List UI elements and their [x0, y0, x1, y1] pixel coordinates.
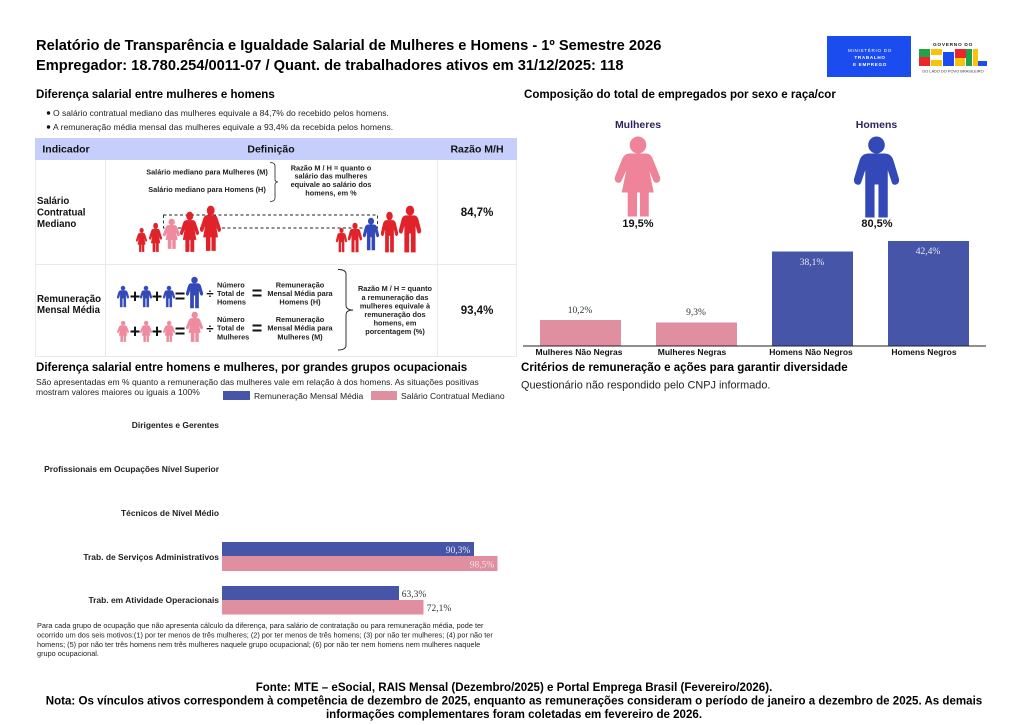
equation: women: +	[130, 322, 140, 342]
bar chart: occupational groups	[44, 420, 498, 614]
equation: women: Mensal Média para	[267, 324, 334, 332]
footer note: Fonte: MTE – eSocial, RAIS Mensal (Dezembro/2025) e Portal Emprega Brasil (Fevereiro/2026).	[256, 682, 772, 694]
text block: footnote: ocorrido um dos seis motivos:(1) por ter menos de três mulheres; (2) por ter menos de três homens; (3) por não ter mulheres; (4) por não ter	[37, 630, 493, 640]
bar chart: race and sex composition: 10,2%	[568, 306, 592, 316]
row: serviços administrativos: 90,3%	[446, 546, 470, 556]
row label: salário contratual mediano	[37, 196, 85, 230]
row 1 ratio explanation	[291, 164, 372, 198]
value: 84,7%: 84,7%	[461, 207, 493, 219]
row label: salário contratual mediano: Mediano	[37, 219, 76, 230]
equation: women	[117, 312, 334, 342]
row 2 ratio explanation: Razão M / H = quanto	[358, 284, 433, 293]
panel: men share: 80,5%	[861, 218, 893, 230]
equation: men: =	[175, 286, 185, 306]
equation: men: ÷	[206, 286, 214, 301]
row 1 ratio explanation: salário das mulheres	[294, 172, 368, 180]
title	[36, 38, 661, 74]
bar chart: race and sex composition: Homens Não Negros	[769, 347, 853, 357]
panel: women share	[615, 119, 661, 230]
equation: women: Mulheres	[217, 332, 249, 342]
icons: men ordered by salary	[336, 206, 421, 252]
median dashed box	[164, 215, 378, 228]
row 2 ratio explanation: homens, em	[374, 318, 417, 328]
equation: men: Mensal Média para	[267, 289, 334, 298]
bar chart: race and sex composition: Mulheres Não Negras	[536, 347, 623, 357]
row: atividade operacional: Trab. em Atividade Operacionais	[88, 595, 219, 605]
row 1 ratio explanation: equivale ao salário dos	[291, 180, 371, 189]
text block: footnote: grupo ocupacional.	[37, 649, 99, 658]
equation: women: ÷	[206, 321, 214, 336]
icon: man	[854, 137, 899, 217]
equation: women: +	[152, 322, 162, 342]
text block: key findings: O salário contratual mediano das mulheres equivale a 84,7% do recebido pelos homens.	[53, 108, 389, 118]
equation: men: Total de	[217, 289, 245, 298]
panel: women share: 19,5%	[622, 218, 654, 230]
equation: women: Total de	[217, 324, 245, 332]
row: atividade operacional	[88, 586, 451, 614]
bar chart: occupational groups: Profissionais em Ocupações Nível Superior	[44, 464, 220, 474]
text block: questionnaire status: Questionário não respondido pelo CNPJ informado.	[521, 380, 770, 392]
logo: Ministério do Trabalho e Emprego: TRABALHO	[854, 55, 886, 60]
row 1 ratio explanation: Razão M / H = quanto o	[291, 164, 372, 172]
row: atividade operacional: 63,3%	[402, 590, 426, 600]
row label: salário contratual mediano: Contratual	[37, 208, 85, 218]
legend	[223, 391, 505, 401]
text block: footnote	[37, 621, 493, 658]
text block: footnote: homens; (5) por não ter três homens nem três mulheres naquele grupo ocupacional; (6) por não ter nem homens nem mulheres naquele	[37, 640, 480, 649]
text block: key findings	[47, 108, 393, 132]
heading: critérios: Critérios de remuneração e ações para garantir diversidade	[521, 362, 848, 374]
bar chart: race and sex composition	[523, 241, 986, 357]
row 1 labels	[146, 168, 268, 194]
panel: men share	[854, 119, 899, 230]
text block: chart description: mostram valores maiores ou iguais a 100%	[36, 387, 200, 397]
heading: grupos ocupacionais: Diferença salarial entre homens e mulheres, por grandes grupos ocupacionais	[36, 362, 467, 374]
table header: Definição	[247, 144, 295, 156]
legend: Salário Contratual Mediano	[401, 391, 505, 401]
text block: chart description: São apresentadas em % quanto a remuneração das mulheres vale em relação à dos homens. As situações positivas	[36, 377, 479, 387]
row label: remuneração mensal média: Remuneração	[37, 294, 101, 305]
icon: woman	[615, 137, 660, 216]
bar chart: occupational groups: Técnicos de Nível Médio	[121, 508, 219, 518]
bar chart: race and sex composition: 42,4%	[916, 247, 940, 257]
row label: remuneração mensal média	[37, 294, 101, 316]
footer note: Nota: Os vínculos ativos correspondem à competência de dezembro de 2025, enquanto as remunerações consideram o período de janeiro a dezembro de 2025. As demais	[46, 696, 982, 708]
equation: men: Homens (H)	[279, 298, 321, 306]
equation: men: +	[152, 286, 162, 306]
value: 93,4%: 93,4%	[461, 305, 493, 317]
bar chart: race and sex composition: Mulheres Negras	[658, 347, 727, 357]
legend: Remuneração Mensal Média	[254, 391, 364, 401]
footer note	[46, 682, 982, 721]
row 1 ratio explanation: homens, em %	[305, 188, 357, 198]
row: serviços administrativos: Trab. de Serviços Administrativos	[83, 552, 219, 562]
logo: Ministério do Trabalho e Emprego: E EMPREGO	[853, 62, 887, 67]
title: Empregador: 18.780.254/0011-07 / Quant. de trabalhadores ativos em 31/12/2025: 118	[36, 58, 624, 74]
logo: Ministério do Trabalho e Emprego: MINISTÉRIO DO	[848, 47, 892, 53]
equation: women: =	[175, 322, 185, 342]
footer note: informações complementares foram coletadas em fevereiro de 2026.	[326, 709, 702, 721]
text block: chart description	[36, 377, 479, 397]
row 2 ratio explanation	[358, 284, 433, 336]
equation: women: Remuneração	[276, 315, 325, 324]
row: serviços administrativos: 98,5%	[470, 560, 494, 570]
equation: men	[117, 277, 334, 308]
logo: Ministério do Trabalho e Emprego	[827, 36, 911, 77]
equation: women: Mulheres (M)	[277, 332, 323, 342]
heading: diferença salarial: Diferença salarial entre mulheres e homens	[36, 89, 275, 101]
icons: women ordered by salary	[136, 206, 221, 252]
row: serviços administrativos	[83, 542, 498, 571]
row 2 brace	[338, 270, 353, 350]
equation: men: Homens	[217, 298, 246, 306]
row 1 labels: Salário mediano para Mulheres (M)	[146, 168, 268, 176]
panel: men share: Homens	[856, 119, 897, 131]
equation: men: Número	[217, 280, 245, 290]
row 1 labels: Salário mediano para Homens (H)	[148, 185, 266, 194]
equation: women: =	[252, 318, 262, 338]
equation: women: Número	[217, 315, 245, 324]
table header: Indicador	[42, 144, 90, 156]
bar chart: occupational groups: Dirigentes e Gerentes	[132, 420, 219, 430]
text block: footnote: Para cada grupo de ocupação que não apresenta cálculo da diferença, para salário de contratação ou para remuneração média, pode ter	[37, 621, 484, 630]
table header	[35, 138, 517, 160]
heading: composição: Composição do total de empregados por sexo e raça/cor	[524, 89, 836, 101]
logo: Governo do Brasil	[919, 42, 987, 74]
table header: Razão M/H	[450, 144, 504, 156]
row 2 ratio explanation: mulheres equivale à	[360, 302, 431, 310]
equation: men: +	[130, 286, 140, 306]
panel: indicator table	[35, 138, 517, 356]
bar chart: race and sex composition: 9,3%	[686, 308, 706, 318]
row: atividade operacional: 72,1%	[427, 604, 451, 614]
row 2 ratio explanation: a remuneração das	[362, 293, 428, 302]
bar chart: race and sex composition: 38,1%	[800, 258, 824, 268]
panel: women share: Mulheres	[615, 119, 661, 131]
bar chart: race and sex composition: Homens Negros	[891, 347, 957, 357]
row label: salário contratual mediano: Salário	[37, 196, 69, 207]
title: Relatório de Transparência e Igualdade Salarial de Mulheres e Homens - 1º Semestre 2026	[36, 38, 661, 54]
equation: men: Remuneração	[276, 280, 325, 290]
row 2 ratio explanation: porcentagem (%)	[365, 327, 425, 336]
logo: Governo do Brasil: DO LADO DO POVO BRASILEIRO	[922, 68, 984, 74]
row 2 ratio explanation: remuneração dos	[364, 310, 426, 319]
row 1 brace	[270, 162, 278, 202]
row label: remuneração mensal média: Mensal Média	[37, 305, 101, 316]
text block: key findings: A remuneração média mensal das mulheres equivale a 93,4% da recebida pelos homens.	[53, 122, 393, 132]
logo: Governo do Brasil: GOVERNO DO	[933, 42, 973, 48]
equation: men: =	[252, 284, 262, 304]
